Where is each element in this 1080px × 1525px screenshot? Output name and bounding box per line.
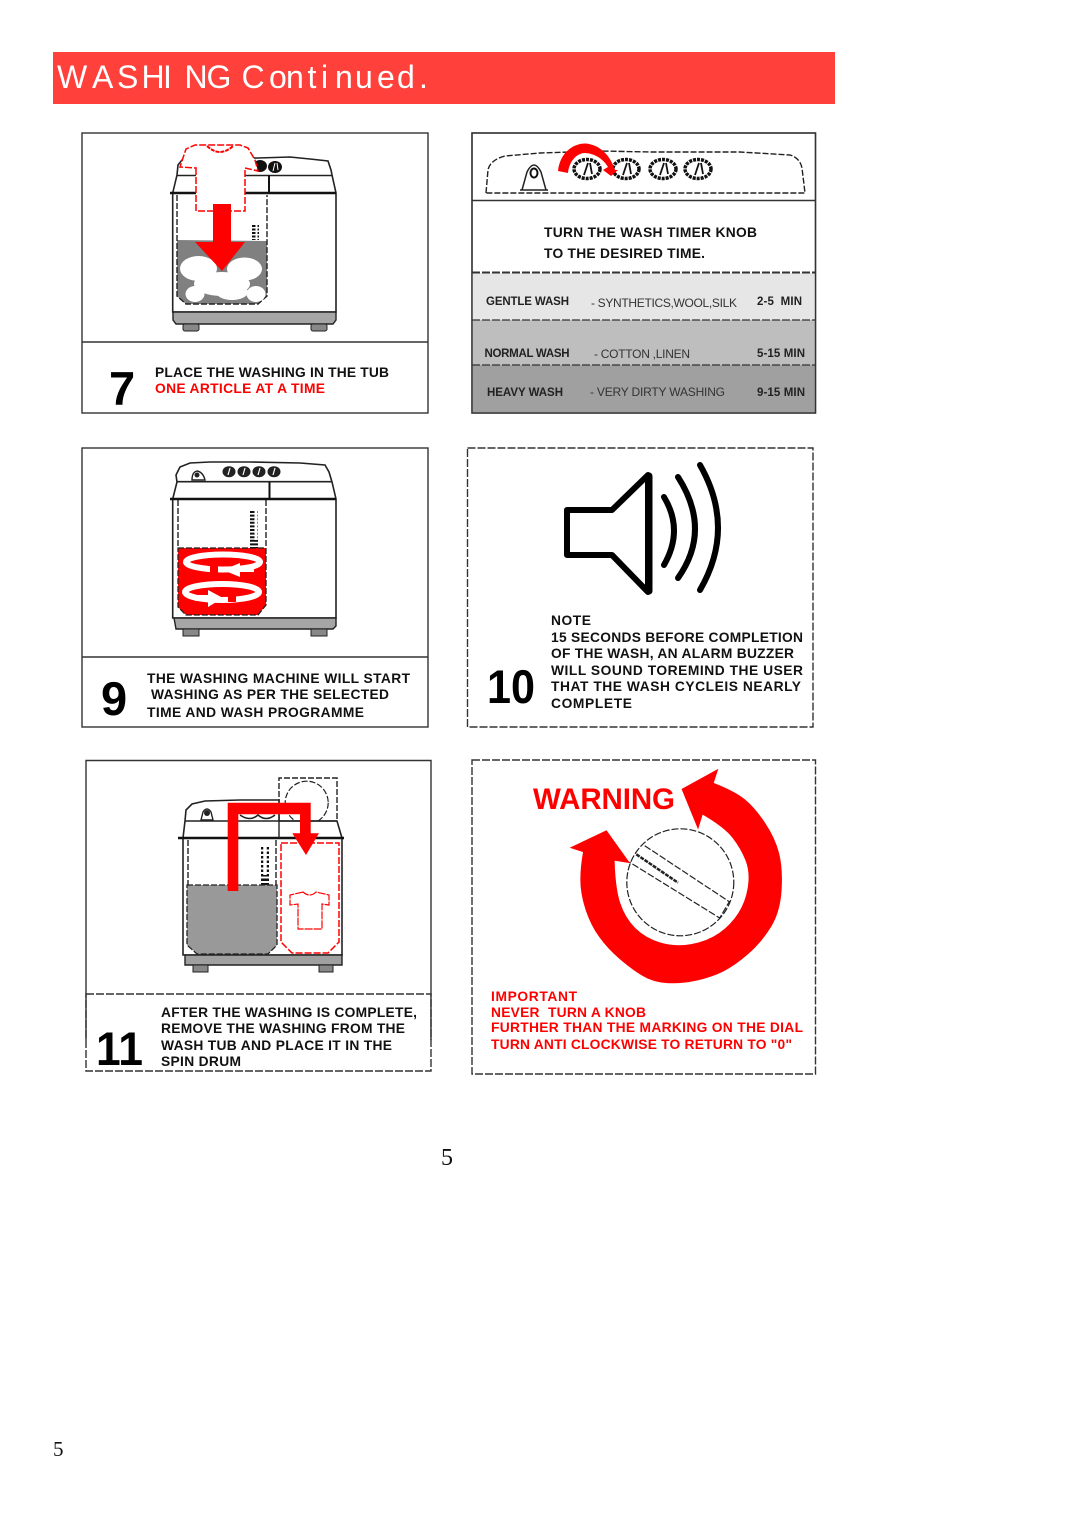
caption: machine will start: TIME AND WASH PROGRAMME: [147, 705, 364, 720]
title banner: [53, 52, 835, 104]
note text: 15 SECONDS BEFORE COMPLETION: [551, 630, 803, 645]
row: heavy wash: 9-15 MIN: [757, 387, 805, 399]
illustration: machine with transfer arrow: [178, 778, 344, 972]
warning heading: WARNING: [533, 783, 675, 816]
panel: step 7 place washing: [82, 133, 428, 415]
caption: machine will start: WASHING AS PER THE SELECTED: [151, 687, 389, 702]
caption: after washing is complete: AFTER THE WASHING IS COMPLETE,: [161, 1005, 417, 1020]
row: gentle wash: 2-5 MIN: [757, 296, 802, 308]
title banner: WASHING Continued.: [57, 59, 428, 95]
instruction: turn the wash timer knob: TURN THE WASH TIMER KNOB: [544, 225, 757, 240]
caption: after washing is complete: REMOVE THE WASHING FROM THE: [161, 1021, 405, 1036]
warning text: [491, 989, 803, 1052]
row: normal wash: - COTTON ,LINEN: [594, 347, 690, 361]
note text: THAT THE WASH CYCLEIS NEARLY: [551, 679, 801, 694]
page number centre: 5: [441, 1145, 453, 1171]
row: heavy wash: [472, 365, 816, 413]
icon: dial knob: [627, 829, 734, 936]
caption: after washing is complete: [161, 1005, 417, 1069]
step number 10: 10: [487, 660, 535, 713]
table: wash programmes: [472, 133, 816, 413]
step number 7: 7: [109, 362, 135, 415]
panel: step 9 machine starts washing: [82, 448, 428, 727]
warning text: TURN ANTI CLOCKWISE TO RETURN TO "0": [491, 1037, 792, 1052]
caption: after washing is complete: WASH TUB AND PLACE IT IN THE: [161, 1038, 392, 1053]
caption: place the washing: [155, 365, 389, 396]
row: gentle wash: GENTLE WASH: [486, 296, 569, 308]
row: normal wash: [472, 320, 816, 365]
instruction: turn the wash timer knob: TO THE DESIRED TIME.: [544, 246, 705, 261]
row: normal wash: NORMAL WASH: [484, 348, 570, 360]
page number bottom: 5: [53, 1437, 64, 1461]
instruction: turn the wash timer knob: [544, 225, 757, 261]
illustration: control console with knobs: [486, 143, 805, 193]
warning text: FURTHER THAN THE MARKING ON THE DIAL: [491, 1020, 803, 1035]
icon: red circular arrow: [571, 770, 781, 983]
caption: machine will start: THE WASHING MACHINE WILL START: [147, 671, 411, 686]
row: gentle wash: - SYNTHETICS,WOOL,SILK: [591, 296, 737, 310]
warning text: IMPORTANT: [491, 989, 578, 1004]
panel: step 10 alarm buzzer note: [468, 448, 813, 727]
row: heavy wash: HEAVY WASH: [487, 387, 563, 399]
note text: [551, 613, 803, 711]
row: heavy wash: - VERY DIRTY WASHING: [590, 385, 725, 399]
note text: OF THE WASH, AN ALARM BUZZER: [551, 646, 794, 661]
illustration: machine with shirt going into tub: [170, 145, 336, 331]
step number 9: 9: [101, 672, 127, 725]
row: gentle wash: [472, 273, 816, 320]
caption: machine will start: [147, 671, 411, 720]
caption: place the washing: PLACE THE WASHING IN THE TUB: [155, 365, 389, 380]
panel: warning: [472, 760, 816, 1074]
icon: speaker with sound waves: [567, 465, 718, 592]
panel: step 11 move washing to spin drum: [86, 760, 431, 1075]
warning text: NEVER TURN A KNOB: [491, 1005, 646, 1020]
caption: after washing is complete: SPIN DRUM: [161, 1054, 241, 1069]
step number 11: 11: [96, 1022, 143, 1075]
row: normal wash: 5-15 MIN: [757, 348, 805, 360]
panel: wash timer knob and wash table: [472, 133, 816, 413]
note text: WILL SOUND TOREMIND THE USER: [551, 663, 803, 678]
caption: place the washing: ONE ARTICLE AT A TIME: [155, 381, 325, 396]
illustration: machine washing with red water: [170, 462, 336, 636]
note text: NOTE: [551, 613, 591, 628]
note text: COMPLETE: [551, 696, 632, 711]
